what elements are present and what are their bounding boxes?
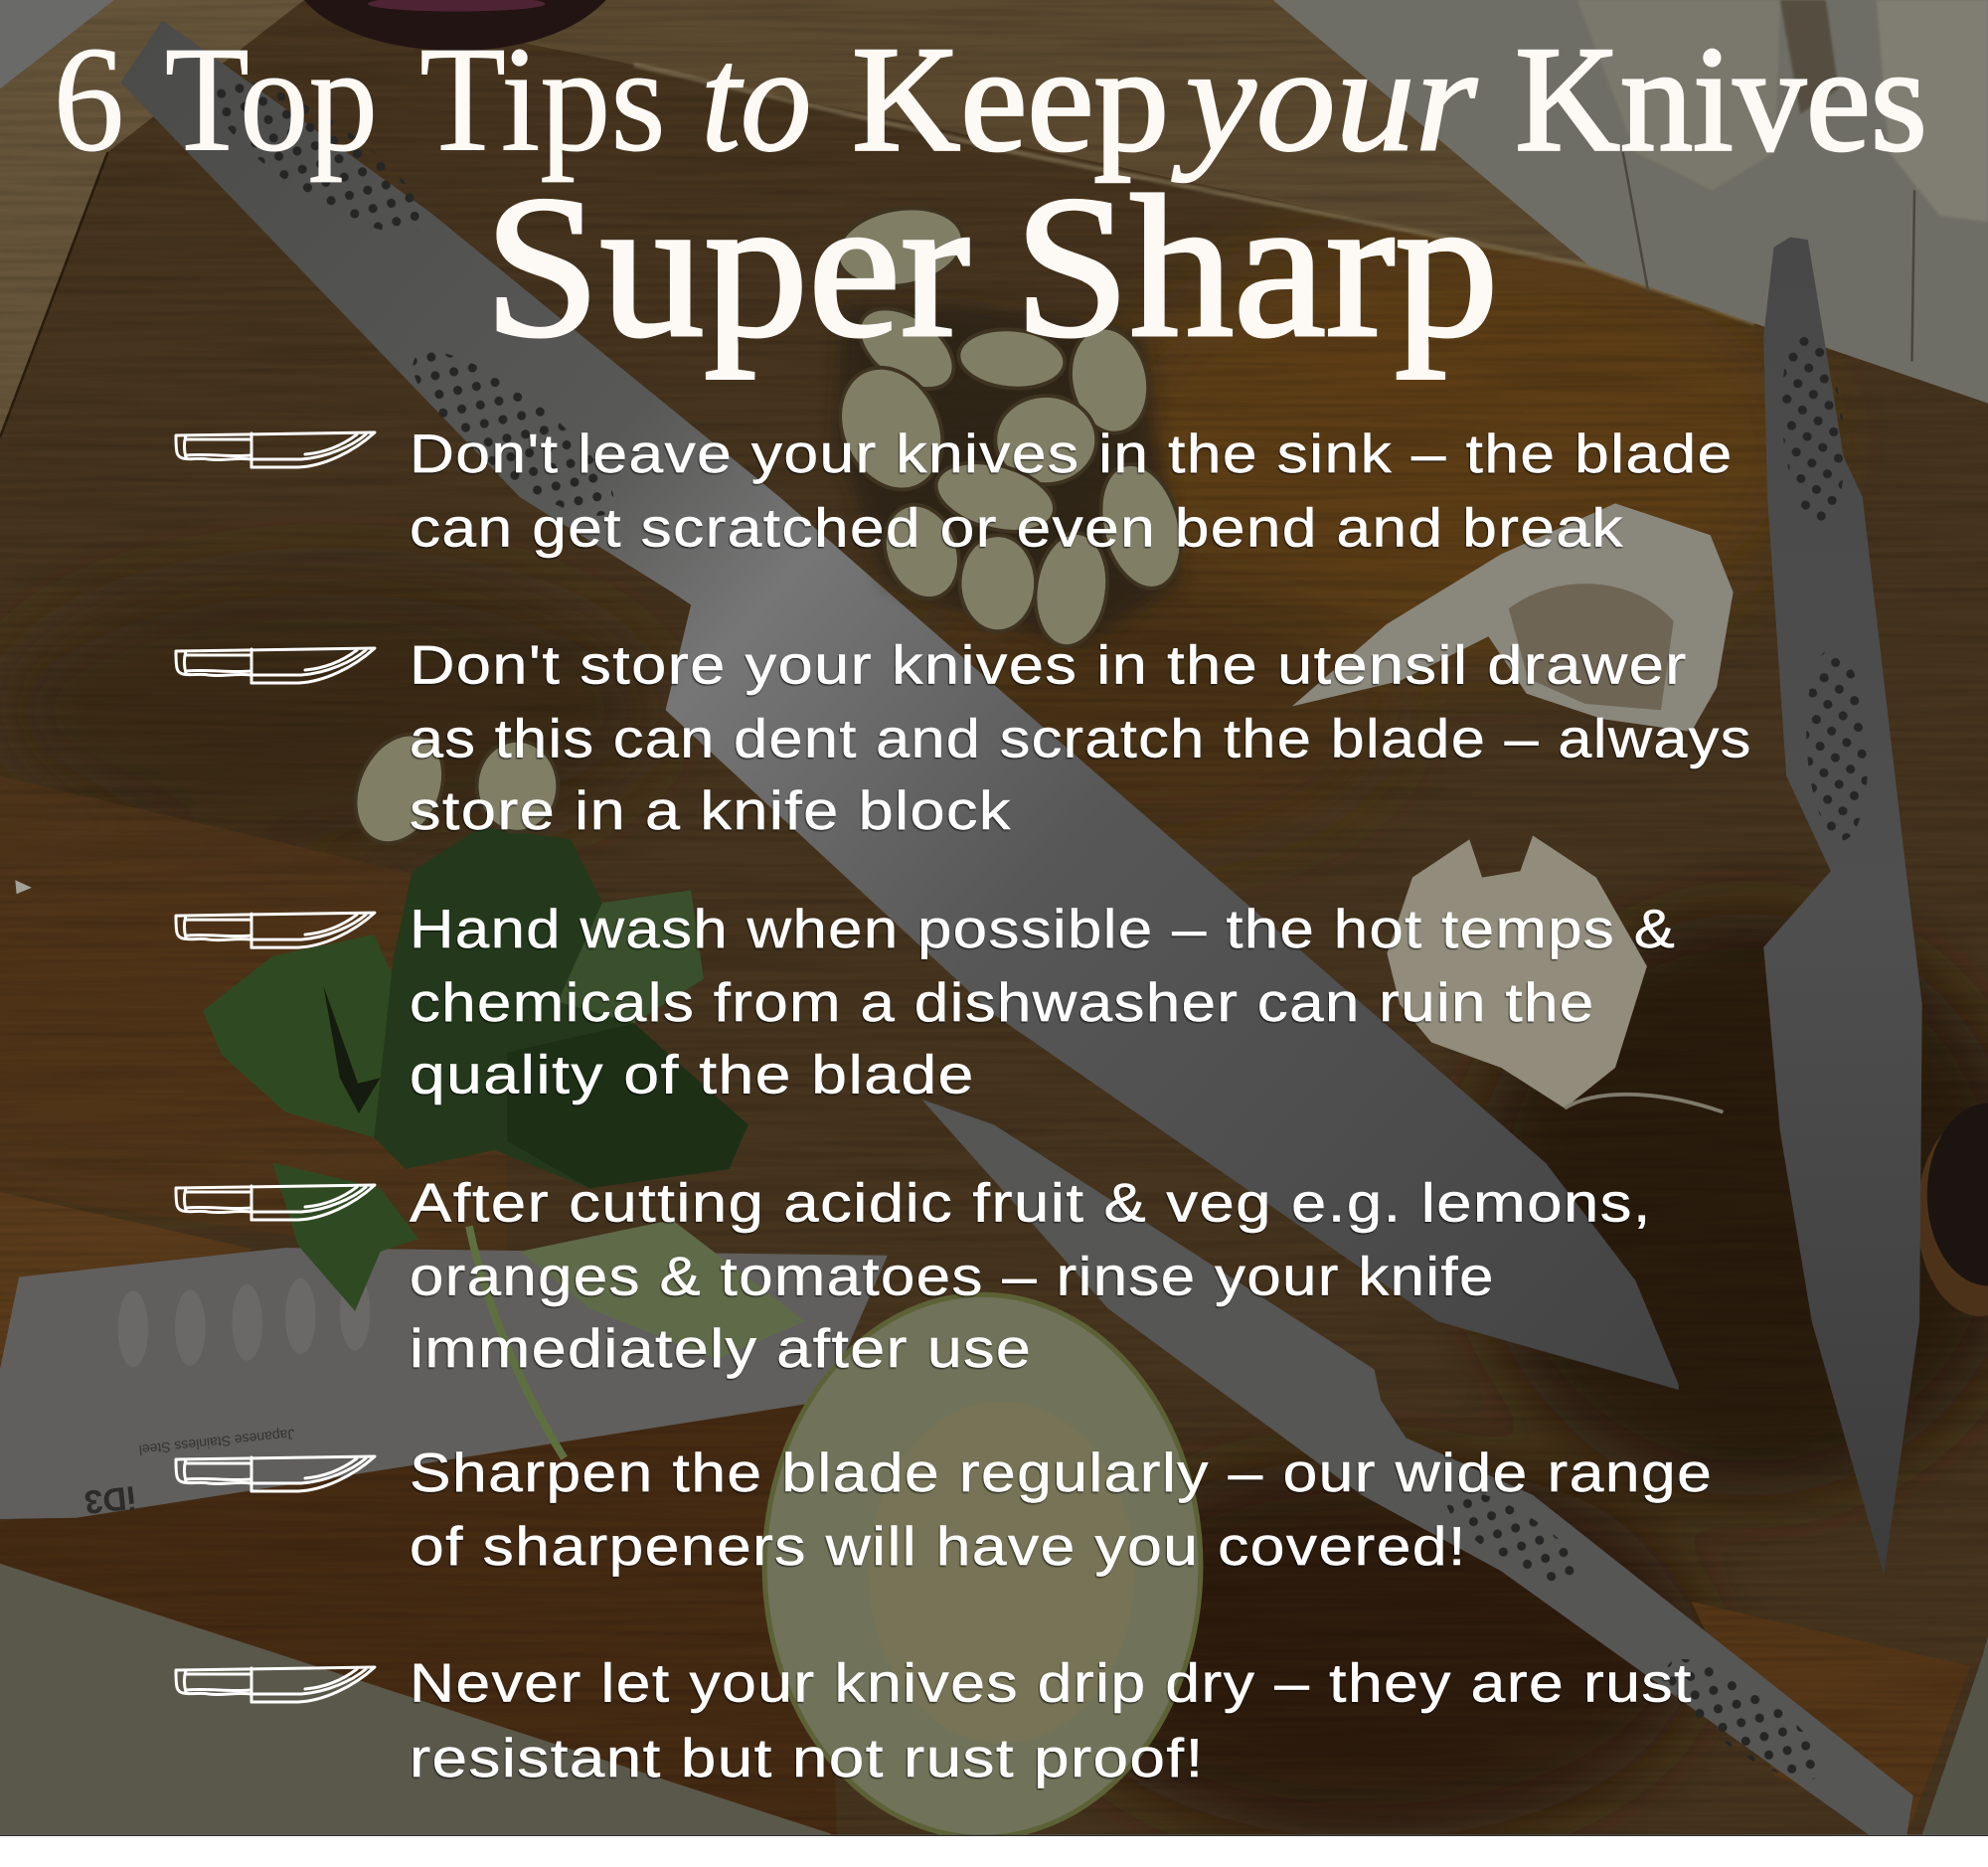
tip 5 text: Sharpen the blade regularly – our wide range: [410, 1442, 1713, 1503]
tip 1 text: Don't leave your knives in the sink – the blade: [410, 423, 1734, 484]
tip 1 text: [410, 423, 1734, 559]
red onion: [304, 0, 606, 51]
tip 6 text: resistant but not rust proof!: [410, 1727, 1205, 1788]
tip 1 text: can get scratched or even bend and break: [410, 497, 1624, 559]
tip 6 text: [410, 1652, 1693, 1788]
tip 2: [176, 633, 1752, 841]
tip 4 text: oranges & tomatoes – rinse your knife: [410, 1245, 1495, 1306]
tip 2 text: Don't store your knives in the utensil drawer: [410, 633, 1688, 695]
tip 4 text: [410, 1171, 1652, 1379]
title line one: [54, 16, 1927, 183]
tip 2 text: [410, 633, 1752, 841]
title line two: Sharp: [1014, 155, 1499, 380]
tip 4 text: After cutting acidic fruit & veg e.g. lemons,: [410, 1171, 1652, 1233]
icon: knife: [176, 432, 375, 467]
marble counter top right: [1273, 0, 1988, 404]
tip 2 text: store in a knife block: [410, 779, 1012, 841]
tip 3 text: [410, 898, 1676, 1104]
title line one: Top: [165, 16, 378, 183]
tip 4: [176, 1171, 1652, 1379]
title line two: [484, 155, 1499, 380]
title line one: Keep: [852, 16, 1169, 183]
title line one: your: [1172, 16, 1478, 183]
utility knife: [921, 1100, 1913, 1835]
title line one: to: [701, 16, 811, 183]
icon: knife: [176, 1456, 375, 1491]
big chef knife: [120, 20, 1679, 1390]
santoku knife: Japanese Stainless Steel: [138, 1427, 295, 1458]
tip 5: [176, 1442, 1713, 1577]
marble counter bottom right: [1922, 1635, 1988, 1835]
icon: knife: [176, 913, 375, 947]
garlic top right: [1577, 0, 1988, 222]
avocado half: [762, 1292, 1203, 1840]
board handle hole: [1917, 1103, 1988, 1316]
pistachios: [339, 199, 1194, 858]
basil leaves: [203, 827, 805, 1458]
marble counter bottom left: [0, 1564, 830, 1835]
tip 4 text: immediately after use: [410, 1317, 1032, 1379]
title line one: 6: [54, 16, 124, 183]
tip 3: [176, 898, 1676, 1104]
garlic clove lower: [1387, 836, 1723, 1112]
santoku knife: [0, 1248, 888, 1520]
title line one: Knives: [1515, 16, 1927, 183]
tip 3 text: chemicals from a dishwasher can ruin the: [410, 971, 1595, 1033]
title line two: Super: [484, 155, 970, 380]
tip 3 text: Hand wash when possible – the hot temps &: [410, 898, 1676, 959]
garlic clove upper: [1292, 503, 1734, 732]
tip 2 text: as this can dent and scratch the blade – always: [410, 707, 1752, 768]
tip 5 text: [410, 1442, 1713, 1577]
icon: knife: [176, 648, 375, 683]
icon: knife: [176, 1185, 375, 1220]
top left knife corner: [0, 0, 114, 88]
tip 6 text: Never let your knives drip dry – they are rust: [410, 1652, 1693, 1714]
tip 3 text: quality of the blade: [410, 1043, 975, 1104]
icon: knife: [176, 1667, 375, 1702]
title line one: Tips: [419, 16, 666, 183]
tip 1: [176, 423, 1734, 559]
left wood strip: [0, 0, 304, 437]
tip 6: [176, 1652, 1693, 1788]
title: [54, 16, 1927, 380]
photo bottom edge: [0, 1835, 1988, 1836]
tip 5 text: of sharpeners will have you covered!: [410, 1515, 1467, 1577]
santoku logo text: iD3: [83, 1478, 137, 1520]
small arrow mark: [15, 880, 32, 894]
slim knife on the right: [1763, 238, 1922, 1575]
